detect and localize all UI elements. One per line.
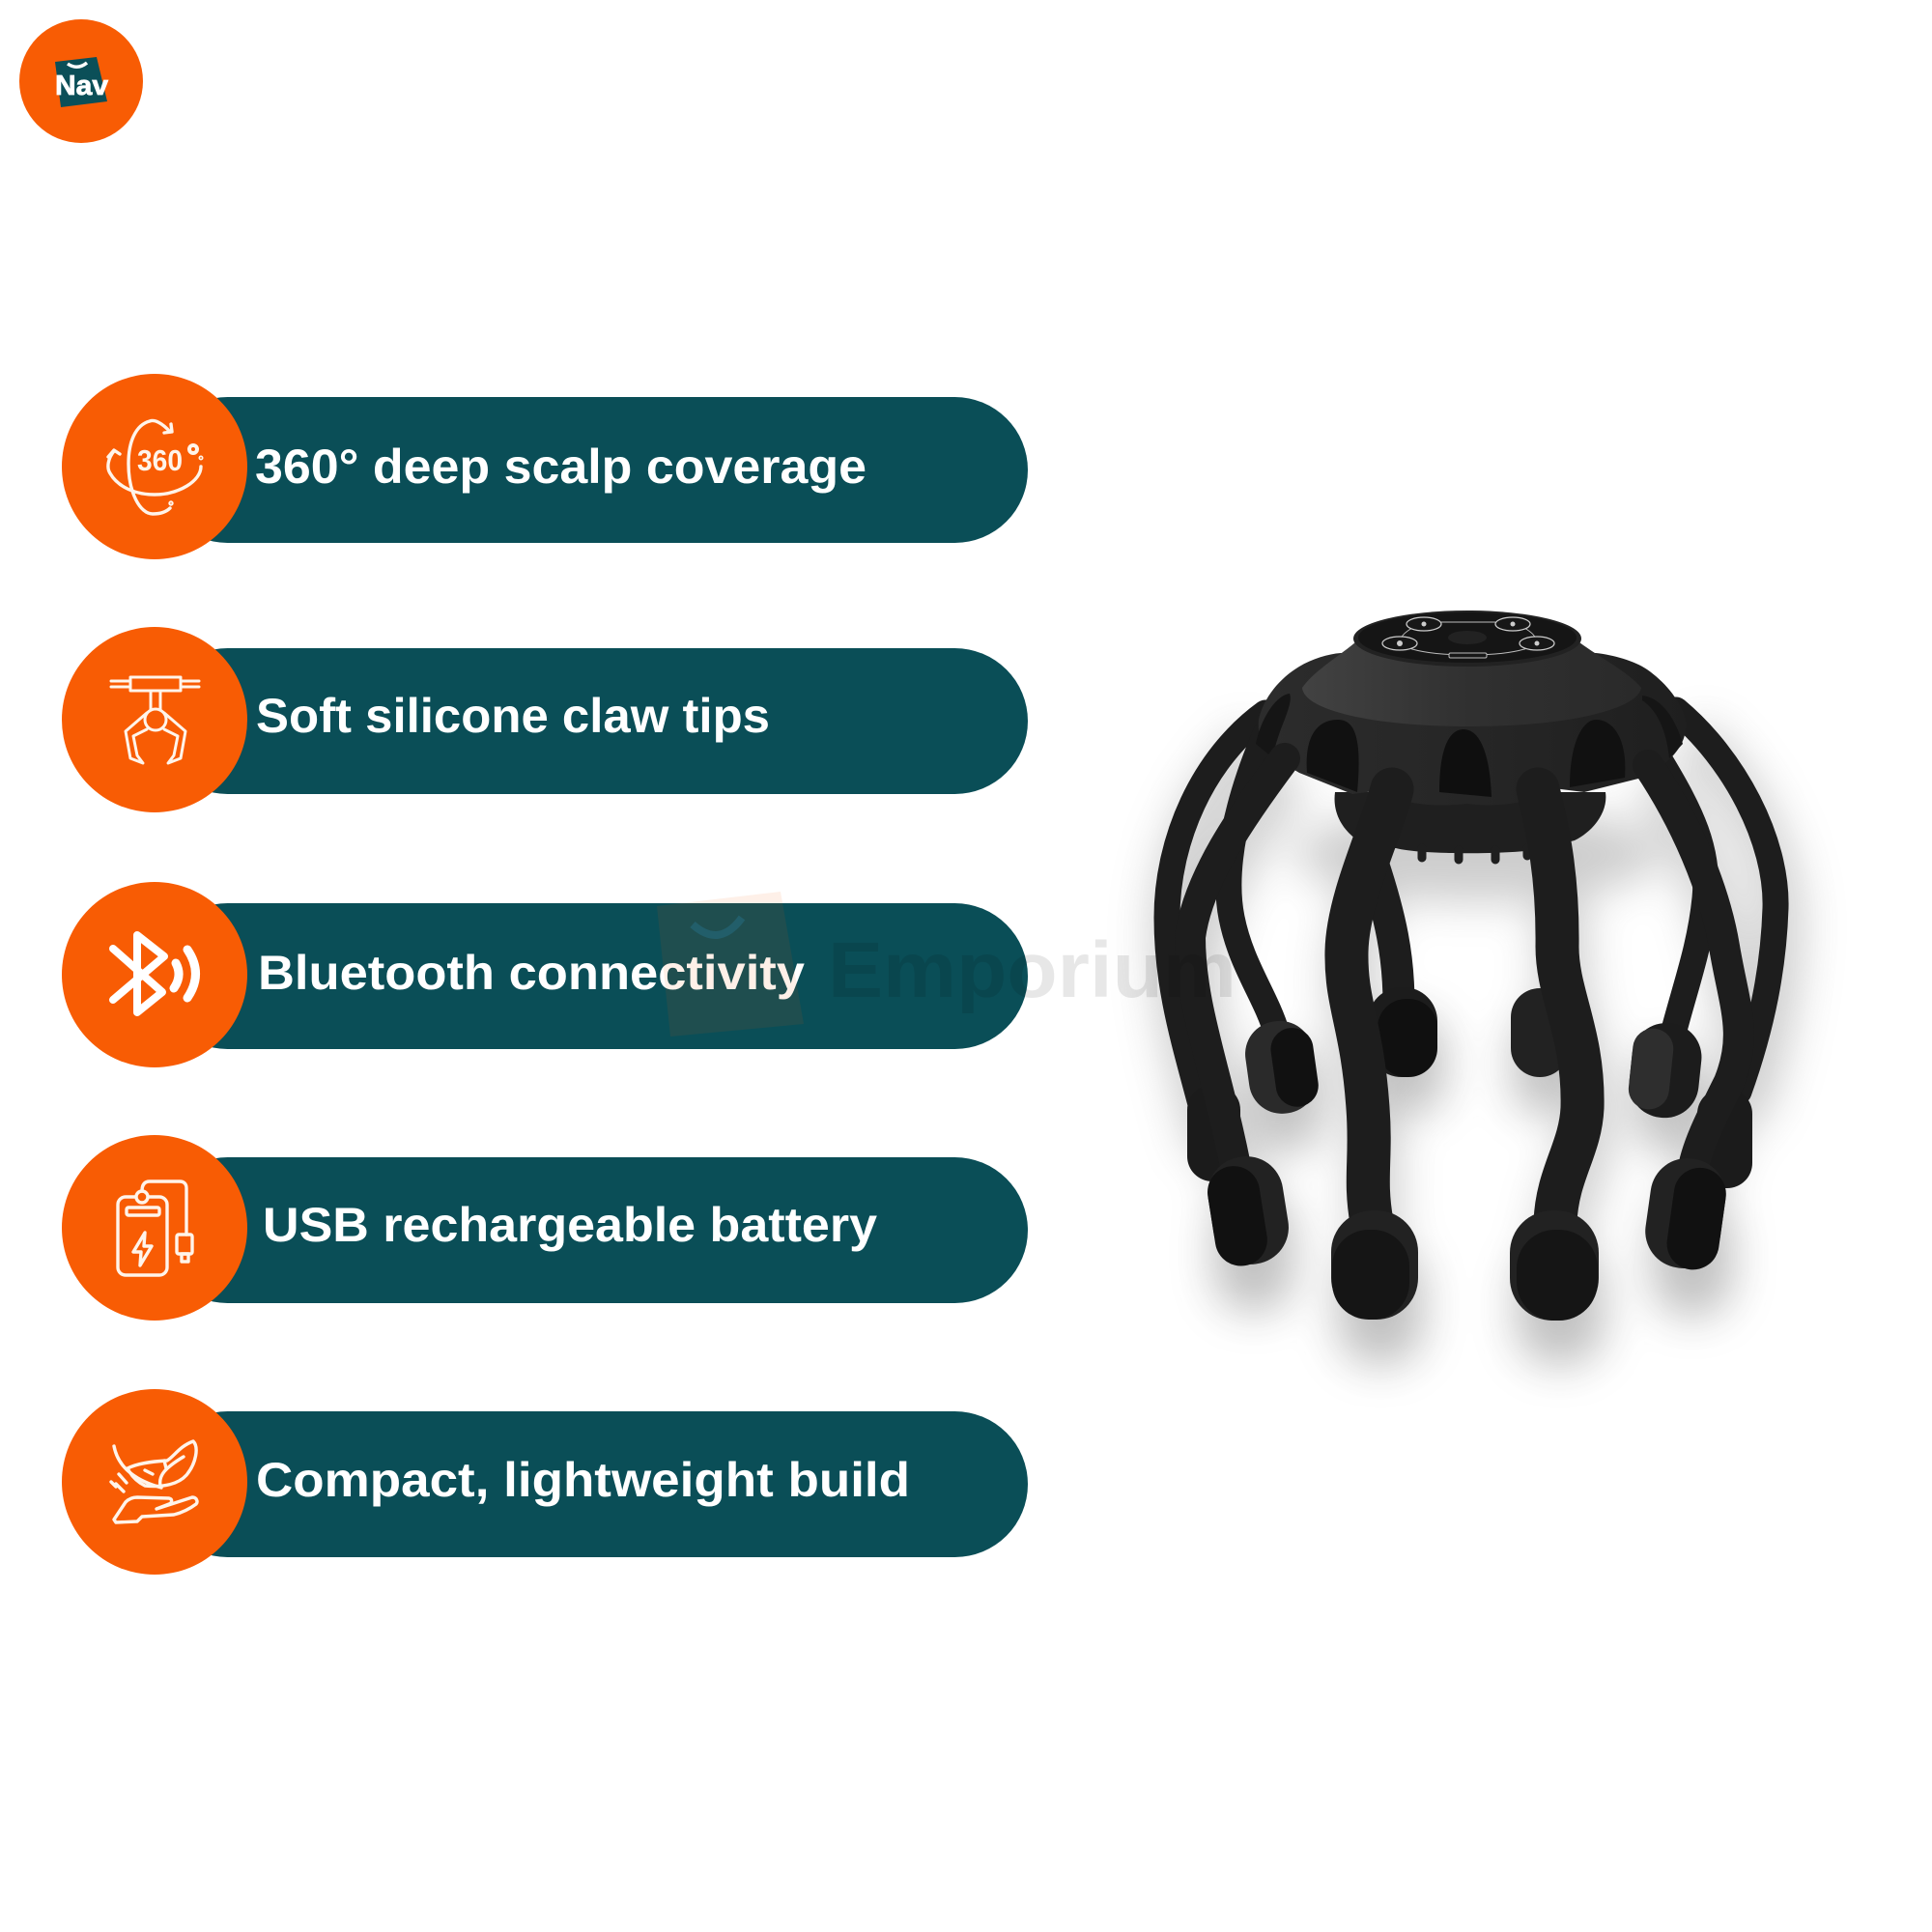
icon: bluetooth <box>113 935 195 1012</box>
feature row: claw tips <box>62 627 1028 812</box>
label: Soft silicone claw tips <box>256 689 770 743</box>
rear-side feet <box>1187 1016 1752 1188</box>
watermark: Emporium <box>828 926 1236 1014</box>
feature row: bluetooth <box>62 882 1028 1067</box>
soft shadow <box>1173 735 1781 1366</box>
product photo: head massager <box>1167 611 1781 1366</box>
label: 360° deep scalp coverage <box>255 440 867 494</box>
icon: claw <box>111 677 199 763</box>
front feet <box>1203 1151 1730 1321</box>
logo badge <box>19 19 143 143</box>
icon: feather on hand <box>111 1441 197 1522</box>
label: Bluetooth connectivity <box>258 946 805 1000</box>
rear tentacles <box>1167 710 1776 1130</box>
icon: 360 rotation: 360 <box>137 443 183 477</box>
logo badge: Nav <box>55 71 108 101</box>
inner stalk and back feet <box>1368 860 1569 1077</box>
upper cone dome <box>1302 642 1641 726</box>
lower massage hub <box>1335 792 1605 860</box>
front tentacles <box>1190 758 1739 1222</box>
feature row: lightweight <box>62 1389 1028 1575</box>
icon: power bank <box>118 1181 192 1275</box>
icon: 360 rotation <box>108 420 202 514</box>
upper skirt with tentacle sockets <box>1256 653 1686 805</box>
label: USB rechargeable battery <box>263 1198 877 1252</box>
feature row: 360 coverage <box>62 374 1028 559</box>
watermark <box>657 892 1236 1037</box>
control panel disc <box>1353 611 1581 667</box>
label: Compact, lightweight build <box>256 1453 910 1507</box>
feature row: battery <box>62 1135 1028 1321</box>
